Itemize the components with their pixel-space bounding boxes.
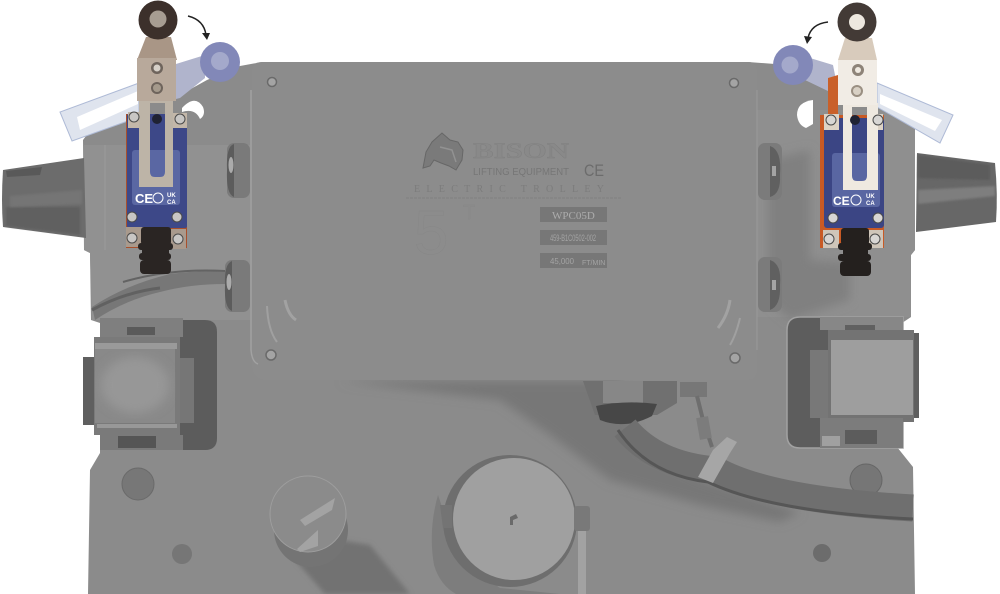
panel: right coil [787, 317, 919, 448]
panel: grey trolley plate [83, 62, 915, 594]
icon: left motor cylinder [2, 158, 86, 238]
clamp [137, 58, 176, 187]
labels: model plates: FT/MIN [582, 260, 605, 267]
screws [824, 115, 883, 244]
text: nameplate [406, 138, 621, 268]
roller [138, 0, 178, 40]
body: CA [167, 200, 176, 206]
screws [127, 112, 185, 244]
boot [838, 228, 872, 276]
icon: large round cap [432, 455, 590, 594]
text: nameplate: CE [584, 161, 604, 180]
labels: model plates: 459-B1C0502-002 [550, 233, 596, 243]
text: nameplate: ELECTRIC TROLLEY [414, 184, 604, 195]
lever arm [838, 38, 877, 60]
icon: cable [583, 381, 913, 519]
lever arm [137, 37, 177, 60]
body [820, 75, 884, 248]
panel: left limit switch [60, 0, 240, 274]
body [126, 112, 187, 249]
body: CE [833, 194, 850, 208]
body: UK [167, 193, 176, 199]
panel: enclosure box [251, 62, 800, 522]
labels: model plates: 45,000 [550, 257, 575, 266]
body: CA [866, 201, 875, 207]
text: nameplate: BISON [473, 138, 569, 163]
icon: shaft knob [270, 476, 410, 594]
text: nameplate: 5 [414, 199, 448, 268]
icon: enclosure screws [266, 78, 740, 363]
icon: right motor cylinder [916, 153, 997, 232]
boot [138, 227, 173, 274]
body: UK [866, 194, 875, 200]
panel: right limit switch [773, 2, 953, 276]
ghost lever: left [60, 42, 240, 141]
icon: cable glands [225, 143, 782, 312]
logo: bison [423, 133, 463, 170]
ghost lever: right [773, 45, 953, 143]
labels: model plates [540, 207, 607, 268]
clamp [838, 60, 878, 190]
labels: model plates: WPC05D [552, 210, 595, 222]
text: nameplate: LIFTING EQUIPMENT [473, 166, 570, 178]
icon: small bolts [122, 464, 882, 564]
arrow: right rotation [804, 22, 828, 44]
arrow: left rotation [188, 16, 210, 40]
roller [838, 2, 876, 42]
body: CE [135, 191, 153, 206]
panel: left coil [83, 318, 217, 450]
text: nameplate: T [463, 202, 475, 224]
